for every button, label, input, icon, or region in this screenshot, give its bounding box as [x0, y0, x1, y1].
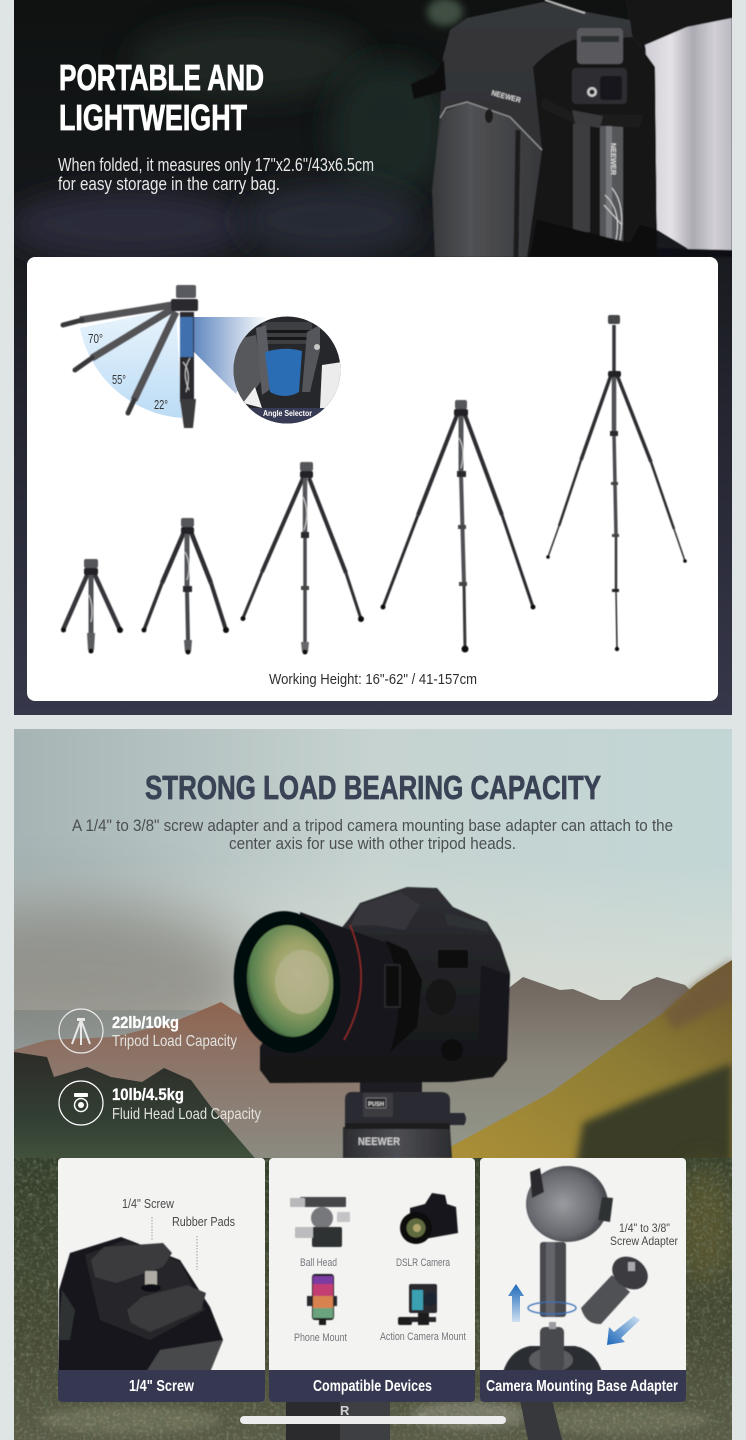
- photo: ball head and adapter: [503, 1166, 654, 1372]
- angle wedge: [80, 308, 182, 418]
- adapter label: [610, 1221, 678, 1248]
- working height label: Working Height: 16"-62" / 41-157cm: [269, 672, 477, 688]
- title: STRONG LOAD BEARING CAPACITY: [145, 769, 601, 806]
- front pocket: [432, 102, 542, 257]
- heading: [60, 64, 264, 131]
- device labels: [294, 1257, 466, 1344]
- icon: ball head: [290, 1197, 350, 1247]
- photo: screw plate: [58, 1237, 223, 1372]
- angle labels: 22°: [154, 397, 168, 412]
- home indicator: [240, 1416, 506, 1424]
- tripod legs below the cards: [286, 1400, 562, 1440]
- device labels: DSLR Camera: [396, 1257, 451, 1269]
- arrow: up: [508, 1284, 524, 1322]
- description: When folded, it measures only 17"x2.6"/43x6.5cm: [58, 155, 374, 175]
- callout labels: 1/4" Screw: [122, 1196, 175, 1211]
- card: compatible devices: [269, 1158, 475, 1402]
- tripod legs below the cards: R: [340, 1403, 350, 1418]
- panel: portable and lightweight: [10, 0, 732, 715]
- icon: action camera mount: [398, 1284, 437, 1325]
- fluid head: PUSH: [368, 1101, 384, 1108]
- tripod height 3: [240, 462, 364, 654]
- heading: PORTABLE AND: [59, 57, 264, 98]
- shoulder strap: [628, 17, 732, 49]
- landscape background: [0, 729, 735, 1440]
- stat: fluid head load capacity: [59, 1081, 261, 1125]
- stat: tripod load capacity: Tripod Load Capacity: [112, 1033, 237, 1050]
- callout lines: [152, 1217, 197, 1270]
- callout labels: [122, 1196, 235, 1229]
- caption bar: [58, 1370, 265, 1402]
- photo: backpack with folded tripod: [411, 0, 732, 257]
- icon: tripod: [59, 1009, 103, 1053]
- tripod height 2: [142, 518, 229, 654]
- zipper line top: [545, 0, 585, 13]
- angle labels: [88, 331, 168, 412]
- device labels: Phone Mount: [294, 1332, 347, 1344]
- caption bar: 1/4" Screw: [129, 1378, 194, 1395]
- caption bar: Camera Mounting Base Adapter: [486, 1378, 678, 1395]
- device labels: Ball Head: [300, 1257, 337, 1269]
- photo: backpack with folded tripod: NEEWER: [609, 143, 616, 175]
- folded-out tripod with angle positions: [63, 285, 198, 428]
- adapter label: 1/4" to 3/8": [619, 1221, 670, 1235]
- caption bar: [480, 1370, 686, 1402]
- tripod height 4: [380, 400, 536, 652]
- panel: strong load bearing capacity: [0, 729, 735, 1440]
- caption bar: [269, 1370, 475, 1402]
- dark forest background: [10, 0, 732, 715]
- side buckle: [411, 60, 446, 99]
- subtitle: A 1/4" to 3/8" screw adapter and a tripod camera mounting base adapter can attach to the: [72, 816, 673, 835]
- device labels: Action Camera Mount: [380, 1331, 466, 1343]
- backpack upper body: [434, 2, 657, 226]
- fluid head: NEEWER: [358, 1136, 400, 1148]
- subtitle: [72, 816, 673, 853]
- stat: fluid head load capacity: 10lb/4.5kg: [112, 1085, 184, 1104]
- callout labels: Rubber Pads: [172, 1214, 235, 1229]
- heading: LIGHTWEIGHT: [59, 97, 247, 138]
- panel: working height card: [27, 257, 718, 701]
- description: for easy storage in the carry bag.: [58, 174, 280, 194]
- subtitle: center axis for use with other tripod heads.: [229, 834, 516, 853]
- description: [58, 155, 374, 194]
- icon: phone mount: [307, 1274, 337, 1325]
- fluid head: [343, 1078, 466, 1158]
- adapter label: Screw Adapter: [610, 1234, 678, 1248]
- arrow: down left: [607, 1316, 640, 1345]
- inset: angle selector: Angle Selector: [263, 408, 313, 418]
- stat: tripod load capacity: [59, 1009, 237, 1053]
- photo: backpack with folded tripod: NEEWER: [490, 88, 522, 105]
- photo: camera on fluid head: [227, 887, 510, 1158]
- angle labels: 70°: [88, 331, 103, 346]
- lens: [300, 912, 422, 1057]
- angle labels: 55°: [112, 372, 126, 387]
- tripod height 1: [61, 559, 123, 654]
- card: camera mounting base adapter: [480, 1158, 686, 1402]
- inset: angle selector: [233, 316, 342, 425]
- stat: fluid head load capacity: Fluid Head Load Capacity: [112, 1106, 261, 1123]
- folded tripod in side pocket: [573, 124, 590, 232]
- black side panel: [527, 37, 657, 257]
- card: 1/4 inch screw: [58, 1158, 265, 1402]
- icon: fluid head: [59, 1081, 103, 1125]
- shirt: [645, 18, 732, 252]
- stat: tripod load capacity: 22lb/10kg: [112, 1013, 179, 1032]
- caption bar: Compatible Devices: [313, 1378, 432, 1395]
- zoom beam: [192, 317, 268, 394]
- camera body: [260, 887, 510, 1083]
- icon: DSLR camera: [400, 1193, 458, 1244]
- tripod height 5: [546, 315, 687, 651]
